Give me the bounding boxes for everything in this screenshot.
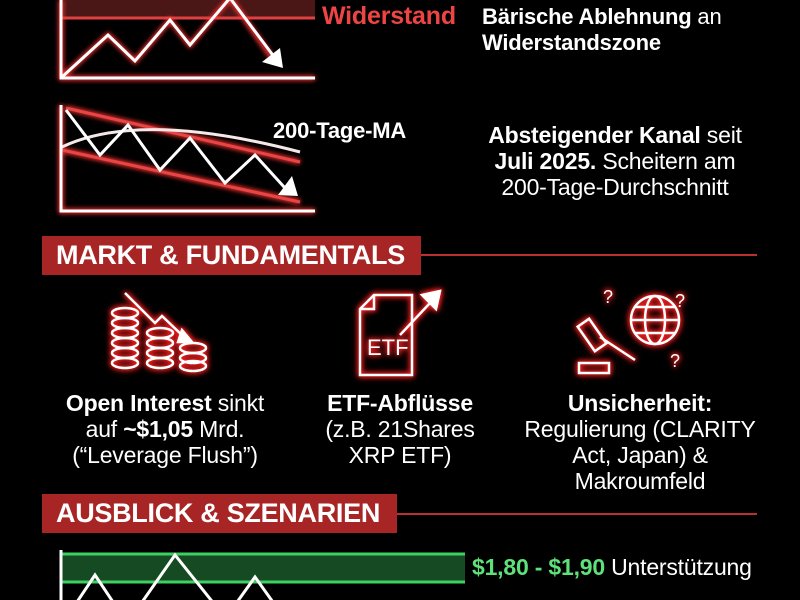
text: uncertainty: [524, 390, 756, 494]
text: ETF outflows: (z.B. 21Shares: [325, 416, 475, 442]
label: support range: $1,80 - $1,90 Unterstützung: [472, 554, 752, 580]
text: ETF outflows: ETF-Abflüsse: [327, 390, 473, 416]
icon: coins falling: [106, 288, 213, 378]
chart: descending channel: [54, 101, 319, 218]
label: Widerstand: Widerstand: [322, 2, 456, 30]
label: 200-Tage-MA: 200-Tage-MA: [273, 118, 406, 143]
text: open interest: [66, 390, 264, 468]
chart: support zone: [60, 550, 465, 600]
text: bearish rejection: Widerstandszone: [482, 30, 661, 55]
text: open interest: (“Leverage Flush”): [72, 442, 258, 468]
text: descending channel: Absteigender Kanal seit: [488, 122, 742, 148]
text: ETF outflows: [325, 390, 475, 468]
text: uncertainty: Regulierung (CLARITY: [524, 416, 756, 442]
text: open interest: auf ~$1,05 Mrd.: [86, 416, 244, 442]
text: uncertainty: Unsicherheit:: [568, 390, 712, 416]
text: bearish rejection: [482, 4, 722, 55]
chart: resistance rejection: [54, 0, 319, 84]
text: open interest: Open Interest sinkt: [66, 390, 264, 416]
text: uncertainty: Makroumfeld: [575, 468, 705, 494]
icon: gavel globe: ?: [675, 291, 685, 311]
icon: gavel globe: [571, 284, 690, 380]
heading: Ausblick & Szenarien: AUSBLICK & SZENARIEN: [56, 498, 380, 528]
icon: ETF document: ETF: [367, 335, 409, 360]
text: descending channel: [488, 122, 742, 200]
icon: gavel globe: ?: [603, 287, 613, 307]
text: ETF outflows: XRP ETF): [349, 442, 451, 468]
text: uncertainty: Act, Japan) &: [572, 442, 708, 468]
heading: Markt & Fundamentals: MARKT & FUNDAMENTALS: [56, 240, 405, 270]
text: descending channel: 200-Tage-Durchschnitt: [501, 174, 729, 200]
text: descending channel: Juli 2025. Scheitern am: [495, 148, 735, 174]
icon: gavel globe: ?: [670, 351, 680, 371]
text: bearish rejection: Bärische Ablehnung an: [482, 4, 722, 29]
icon: ETF document: [352, 284, 447, 382]
